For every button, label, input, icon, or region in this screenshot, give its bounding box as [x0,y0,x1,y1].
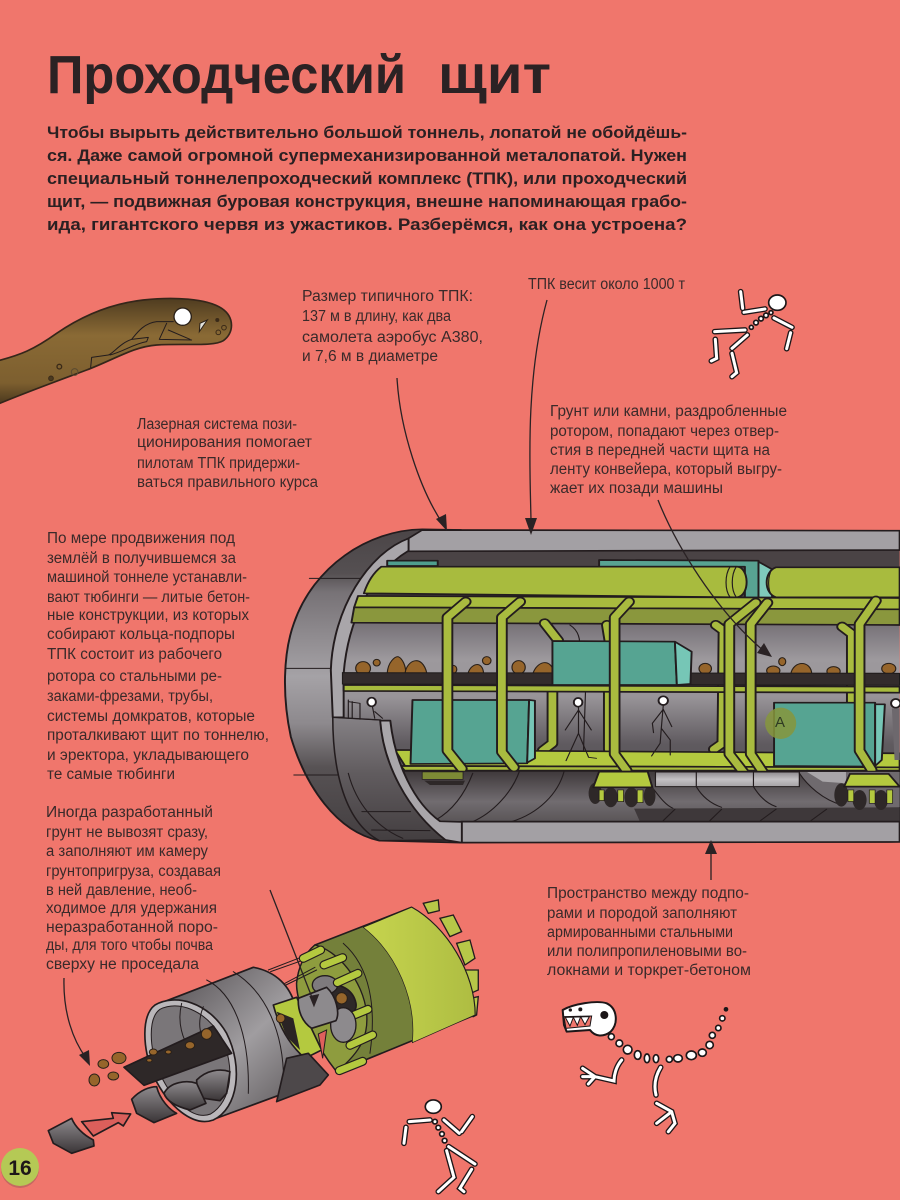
bogie centre [589,772,655,807]
letter A: А [775,714,785,731]
arrow: pressure chamber [270,890,313,1000]
label: tunnel segments: ные конструкции, из которых [47,607,249,624]
lime chamber [273,997,322,1058]
label: TBM composition: ротора со стальными ре- [47,668,222,685]
label: space filling: рами и породой заполняют [547,905,737,922]
intro text block: специальный тоннелепроходческий комплекс (ТПК), или проходческий [47,170,687,188]
rocks on conveyor [147,1029,212,1062]
label: space filling: армированными стальными [547,924,733,941]
label: tunnel segments: По мере продвижения под [47,530,235,547]
eye [174,308,191,325]
pistons [268,950,373,1071]
label: TBM composition: системы домкратов, которые [47,708,255,725]
marker A [765,708,796,739]
label: soil and conveyor: стия в передней части щита на [550,442,770,459]
label: TBM composition: ТПК состоит из рабочего [47,646,222,663]
dinosaur skeleton [563,1002,728,1132]
back braces [543,623,852,751]
label: earth pressure chamber: Иногда разработанный [46,804,213,821]
inner rim [331,538,409,717]
label: size of TBM [302,288,483,365]
label: tunnel segments: машиной тоннеле устанавли- [47,569,247,586]
label: TBM weight: ТПК весит около 1000 т [528,276,685,293]
walking figure 1 [565,698,596,761]
teal strips [387,561,438,566]
label: laser positioning: пилотам ТПК придержи- [137,455,300,472]
teal box lower left [411,700,535,764]
page number badge: 16 [8,1157,32,1180]
label: earth pressure chamber: ходимое для удержания [46,900,217,917]
wall [342,623,900,771]
arrow: size label [397,378,447,531]
label: earth pressure chamber: сверху не проседала [46,956,199,973]
shell top [407,530,900,551]
lower rim [380,721,462,843]
limbs [583,1060,675,1132]
label: tunnel segments [47,530,250,643]
central grey block [298,987,356,1058]
page number badge [1,1148,39,1188]
label: space filling: локнами и торкрет-бетоном [547,962,751,979]
label: space filling: или полипропиленовыми во- [547,943,747,960]
title: щит [438,45,551,105]
label: tunnel segments: землёй в получившемся за [47,550,236,567]
front platform [333,700,380,720]
teal box lower right [774,703,885,767]
spine [608,1007,728,1063]
label: laser positioning [137,416,318,491]
falling rocks [89,1052,126,1086]
arrow: space label [705,840,717,880]
inner olive ring [297,945,367,1072]
illustration: graboid worm [0,298,231,404]
label: earth pressure chamber: грунтопригруза, создавая [46,863,221,880]
label: earth pressure chamber: грунт не вывозят сразу, [46,824,208,841]
conveyor support rail [344,685,900,693]
left bogie [422,772,465,785]
arrow: conveyor label [658,500,772,657]
label: soil and conveyor: ротором, попадают через отвер- [550,423,779,440]
label: earth pressure chamber [46,804,221,973]
label: TBM composition: те самые тюбинги [47,766,175,783]
tunnel segments [48,1070,230,1153]
skeleton figure bottom [404,1100,475,1192]
label: soil and conveyor: ленту конвейера, который выгру- [550,461,782,478]
label: TBM composition: проталкивают щит по тоннелю, [47,727,269,744]
label: size of TBM: 137 м в длину, как два [302,308,451,325]
rear dark segments [277,1053,328,1102]
illustration: small TBM machine [48,900,478,1153]
label: size of TBM: Размер типичного ТПК: [302,288,473,305]
label: size of TBM: самолета аэробус А380, [302,329,483,346]
bottom shell [461,822,900,843]
title: Проходческий [47,45,406,105]
arrow: weight label [525,300,547,535]
label: tunnel segments: собирают кольца-подпоры [47,626,235,643]
skull [563,1002,616,1035]
red arrow [82,1113,131,1136]
label: earth pressure chamber: ды, для того чтобы почва [46,937,213,954]
lower tunnel floor [401,771,900,822]
skeleton figure top [711,292,792,377]
label: laser positioning: ционирования помогает [137,434,312,451]
operator figure [367,698,383,718]
rocks on conveyor [356,657,896,676]
walking figure 2 [652,696,672,756]
label: TBM composition: и эректора, укладывающего [47,747,249,764]
front panel [333,717,446,841]
green pipes [364,567,747,597]
conveyor belt [342,673,900,685]
label: earth pressure chamber: неразработанной поро- [46,919,218,936]
label: tunnel segments: вают тюбинги — литые бетон- [47,589,250,606]
intro text block: Чтобы вырыть действительно большой тоннель, лопатой не обойдёшь- [47,124,687,142]
cutter head teeth [423,900,478,1017]
conveyor [124,1026,232,1085]
intro text block: ида, гигантского червя из ужастиков. Разберёмся, как она устроена? [47,216,687,234]
intro text block [47,124,687,234]
main tunnel cross-section [285,529,900,843]
label: earth pressure chamber: в ней давление, необ- [46,882,197,899]
label: TBM composition: заками-фрезами, трубы, [47,688,213,705]
bogie right [834,774,900,810]
label: space filling: Пространство между подпо- [547,885,749,902]
arrow: to conveyor discharge [64,978,90,1066]
ring seam line [343,943,372,1053]
label: size of TBM: и 7,6 м в диаметре [302,348,438,365]
teal box upper [552,641,692,685]
label: space filling [547,885,751,979]
label: laser positioning: ваться правильного курса [137,474,318,491]
floor deck [395,750,900,767]
tube opening [145,1000,236,1121]
intro text block: ся. Даже самой огромной супермеханизированной металопатой. Нужен [47,147,687,165]
label: soil and conveyor: Грунт или камни, раздробленные [550,403,787,420]
green beams [354,596,900,609]
intro text block: щит, — подвижная буровая конструкция, внешне напоминающая грабо- [47,193,687,211]
inner dark hub [327,985,356,1018]
cylinder light band [363,907,475,1043]
label: soil and conveyor [550,403,787,497]
outer nose shell [285,529,461,843]
label: soil and conveyor: жает их позади машины [550,480,723,497]
walking figure 3 [891,699,900,760]
label: TBM composition [47,646,269,783]
rear grey tube [160,967,325,1121]
green struts [447,601,876,774]
label: earth pressure chamber: а заполняют им камеру [46,843,208,860]
dark upper lining [352,549,900,625]
front cylinder [297,907,475,1072]
label: laser positioning: Лазерная система пози- [137,416,297,433]
